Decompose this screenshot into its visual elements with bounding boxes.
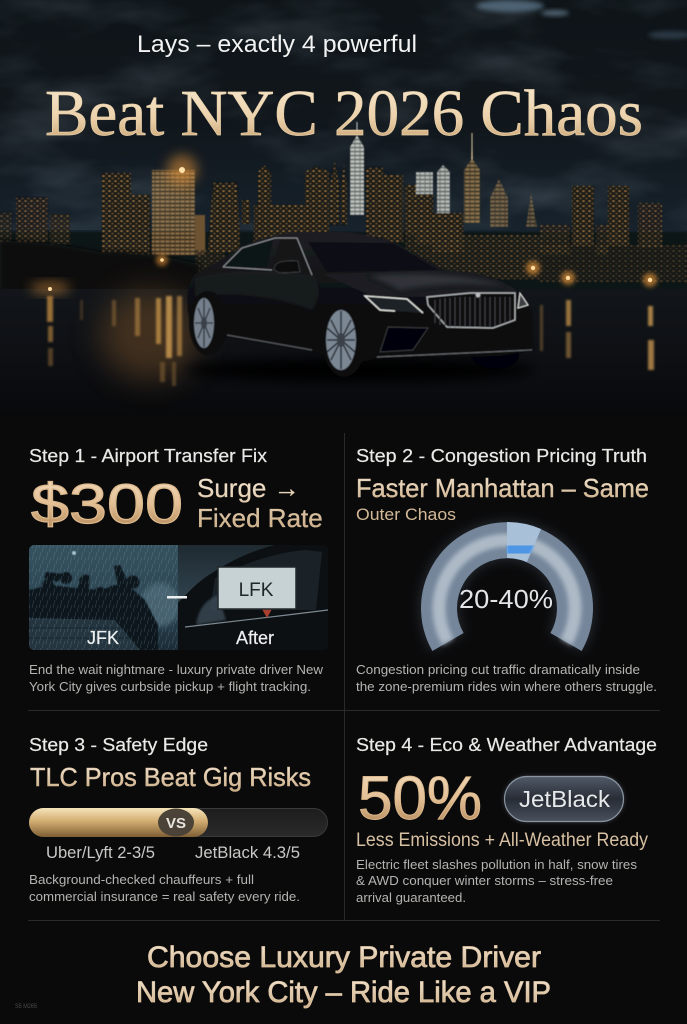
step 4 heading: Step 4 - Eco & Weather Advantage <box>356 734 657 755</box>
car front wheel <box>324 303 362 377</box>
step 2 description: the zone-premium rides win where others struggle. <box>356 679 657 694</box>
car shadow <box>185 358 535 382</box>
car right wheel <box>472 353 519 368</box>
after: private car window <box>178 545 328 650</box>
step 4 subheadline: Less Emissions + All-Weather Ready <box>356 830 648 851</box>
hood panel <box>322 270 518 297</box>
step 3 description: commercial insurance = real safety every ride. <box>29 889 300 904</box>
headlight <box>365 296 423 313</box>
step 4 description: & AWD conquer winter storms – stress-free <box>356 873 613 888</box>
step 2 heading: Step 2 - Congestion Pricing Truth <box>356 445 647 466</box>
Uber/Lyft rating: Uber/Lyft 2-3/5 <box>46 844 155 862</box>
car body <box>187 232 533 366</box>
panel: step 2 congestion pricing <box>356 445 657 694</box>
car mirror <box>274 261 300 273</box>
LFK sign <box>218 567 296 609</box>
JetBlack pill badge <box>504 776 624 822</box>
step 4 description: arrival guaranteed. <box>356 890 466 905</box>
step 2 headline: Faster Manhattan – Same <box>356 473 649 503</box>
rating comparison bar <box>29 808 328 837</box>
bottom chrome strip <box>377 350 532 357</box>
luxury black car <box>185 232 535 382</box>
panel: step 4 eco and weather <box>356 734 657 905</box>
step 2 description: Congestion pricing cut traffic dramatically inside <box>356 662 640 677</box>
step 1 description: York City gives curbside pickup + flight tracking. <box>29 679 311 694</box>
side panel sheen <box>195 271 318 310</box>
main title: Beat NYC 2026 Chaos <box>45 77 643 150</box>
panel dividers <box>28 433 660 920</box>
pill body <box>504 776 624 822</box>
call to action: Choose Luxury Private Driver <box>147 941 541 974</box>
panel: step 1 airport transfer <box>29 445 328 694</box>
street lights and glows <box>30 155 657 293</box>
right headlight <box>518 293 528 308</box>
city skyline buildings <box>0 122 687 292</box>
gauge highlight <box>439 540 575 642</box>
JFK label: JFK <box>87 628 119 648</box>
gauge value: 20-40% <box>459 584 553 614</box>
side sill <box>227 335 312 350</box>
small watermark: S5 M265 <box>15 1004 38 1010</box>
gold reflections on wet road <box>47 290 654 386</box>
gauge blue segment <box>507 540 534 552</box>
gauge glow <box>439 540 575 642</box>
grille <box>427 293 515 328</box>
step 1 description: End the wait nightmare - luxury private driver New <box>29 662 323 677</box>
gauge ring <box>439 540 575 642</box>
arrow dash <box>167 596 187 598</box>
wet ground <box>0 289 687 358</box>
step 3 description: Background-checked chauffeurs + full <box>29 872 254 887</box>
surge to fixed rate label: Fixed Rate <box>197 503 323 533</box>
chrome window line <box>223 238 312 275</box>
call to action: New York City – Ride Like a VIP <box>136 976 551 1009</box>
hood highlight <box>370 274 505 290</box>
dark treeline at waterfront <box>0 240 200 292</box>
surge to fixed rate label: Surge → <box>197 473 300 503</box>
night sky with clouds <box>0 0 687 295</box>
LFK sign: LFK <box>239 580 274 601</box>
hero fade to black <box>0 405 687 417</box>
hero photo: NYC skyline and luxury car <box>0 0 687 417</box>
pill glow <box>504 776 624 822</box>
big stat $300: $300 <box>31 472 183 535</box>
intro line: Lays – exactly 4 powerful <box>137 31 417 58</box>
car side windows <box>227 240 299 267</box>
JetBlack rating: JetBlack 4.3/5 <box>195 844 300 862</box>
step 1 heading: Step 1 - Airport Transfer Fix <box>29 445 268 466</box>
After label: After <box>236 628 274 648</box>
car rear wheel <box>189 291 227 355</box>
step 4 description: Electric fleet slashes pollution in half, snow tires <box>356 857 637 872</box>
before and after image <box>29 545 328 650</box>
pill label: JetBlack <box>519 786 611 812</box>
panel: step 3 safety edge <box>29 734 328 904</box>
call to action <box>136 941 551 1009</box>
step 3 headline: TLC Pros Beat Gig Risks <box>30 762 311 792</box>
VS badge: VS <box>166 815 186 832</box>
big stat 50%: 50% <box>358 764 482 832</box>
lower intake <box>380 327 428 352</box>
before: crowd in rain at JFK <box>29 545 180 650</box>
bar gold fill <box>29 808 208 837</box>
VS badge <box>158 808 194 836</box>
bar track <box>30 808 328 836</box>
step 2 subheadline: Outer Chaos <box>356 506 456 524</box>
step 3 heading: Step 3 - Safety Edge <box>29 734 208 755</box>
semi-circular gauge 20-40% <box>439 540 575 642</box>
windscreen <box>308 242 438 272</box>
